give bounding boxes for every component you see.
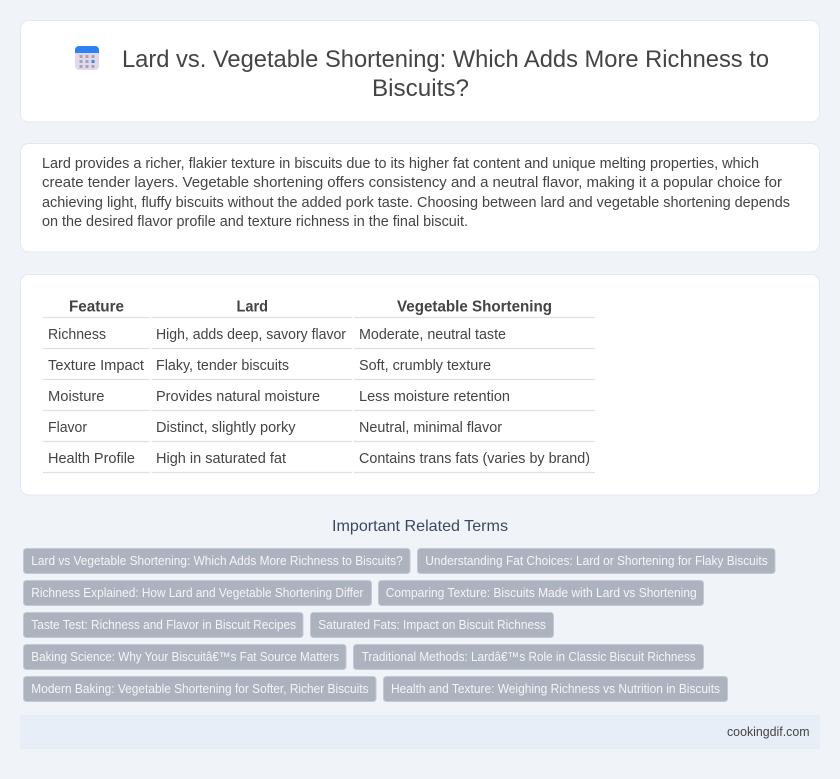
row: richness: [48, 327, 506, 343]
panel: intro text: create tender layers. Vegetable shortening offers consistency and a neutral flavor, making it a popular choice for: [42, 175, 782, 191]
tag: Taste Test: Richness and Flavor in Biscuit Recipes: [31, 618, 296, 632]
tag: Baking Science: Why Your Biscuitâ€™s Fat Source Matters: [31, 650, 339, 664]
row: flavor: Neutral, minimal flavor: [359, 420, 502, 436]
tag: Saturated Fats: Impact on Biscuit Richness: [318, 618, 546, 632]
row: richness: High, adds deep, savory flavor: [156, 327, 346, 343]
tag: [378, 580, 704, 606]
title: Lard vs. Vegetable Shortening: Which Adds More Richness to: [122, 46, 769, 73]
title: [122, 46, 769, 102]
tag: Traditional Methods: Lardâ€™s Role in Classic Biscuit Richness: [362, 650, 696, 664]
icon: calendar: [75, 46, 99, 70]
tag: [384, 676, 728, 702]
tag: [418, 548, 775, 574]
row: health profile: [48, 451, 590, 467]
tag: Modern Baking: Vegetable Shortening for Softer, Richer Biscuits: [31, 682, 369, 696]
title: Biscuits?: [372, 75, 469, 102]
row: texture impact: Soft, crumbly texture: [359, 358, 491, 374]
table header: [69, 298, 552, 316]
tag: Lard vs Vegetable Shortening: Which Adds More Richness to Biscuits?: [31, 554, 403, 568]
row: moisture: Provides natural moisture: [156, 389, 320, 405]
table header: Lard: [236, 298, 268, 316]
tag: [310, 612, 554, 638]
row: moisture: [48, 389, 510, 405]
panel: intro text: Lard provides a richer, flakier texture in biscuits due to its higher fat content and unique melting properties, which: [42, 156, 759, 172]
row: health profile: High in saturated fat: [156, 451, 286, 467]
panel: comparison table: [20, 274, 820, 495]
tag: [24, 548, 410, 574]
tag: Comparing Texture: Biscuits Made with Lard vs Shortening: [386, 586, 697, 600]
tag: Health and Texture: Weighing Richness vs Nutrition in Biscuits: [391, 682, 720, 696]
row: flavor: Flavor: [48, 420, 87, 436]
panel: intro text: achieving light, fluffy biscuits without the added pork taste. Choosing between lard and vegetable shortening depends: [42, 195, 790, 211]
tag: [24, 644, 346, 670]
table header: Feature: [69, 298, 124, 316]
tag: [24, 676, 376, 702]
row: texture impact: [48, 358, 491, 374]
row: health profile: Contains trans fats (varies by brand): [359, 451, 590, 467]
tag: [24, 580, 372, 606]
panel: intro text: on the desired flavor profile and texture richness in the final biscuit.: [42, 214, 468, 230]
row: texture impact: Flaky, tender biscuits: [156, 358, 289, 374]
row: flavor: [48, 420, 502, 436]
row: flavor: Distinct, slightly porky: [156, 420, 296, 436]
row: moisture: Moisture: [48, 389, 104, 405]
row: richness: Moderate, neutral taste: [359, 327, 506, 343]
row: texture impact: Texture Impact: [48, 358, 144, 374]
tag: [354, 644, 704, 670]
panel: header: [20, 20, 820, 122]
table header: Vegetable Shortening: [397, 298, 552, 316]
footer: [20, 715, 820, 749]
heading: related terms: Important Related Terms: [332, 518, 508, 535]
row: moisture: Less moisture retention: [359, 389, 510, 405]
row: health profile: Health Profile: [48, 451, 135, 467]
row: richness: Richness: [48, 327, 106, 343]
panel: intro text: [20, 144, 820, 252]
tag: [24, 612, 303, 638]
related terms tags: [24, 548, 775, 702]
tag: Richness Explained: How Lard and Vegetable Shortening Differ: [31, 586, 364, 600]
tag: Understanding Fat Choices: Lard or Shortening for Flaky Biscuits: [425, 554, 768, 568]
footer: cookingdif.com: [727, 724, 810, 739]
